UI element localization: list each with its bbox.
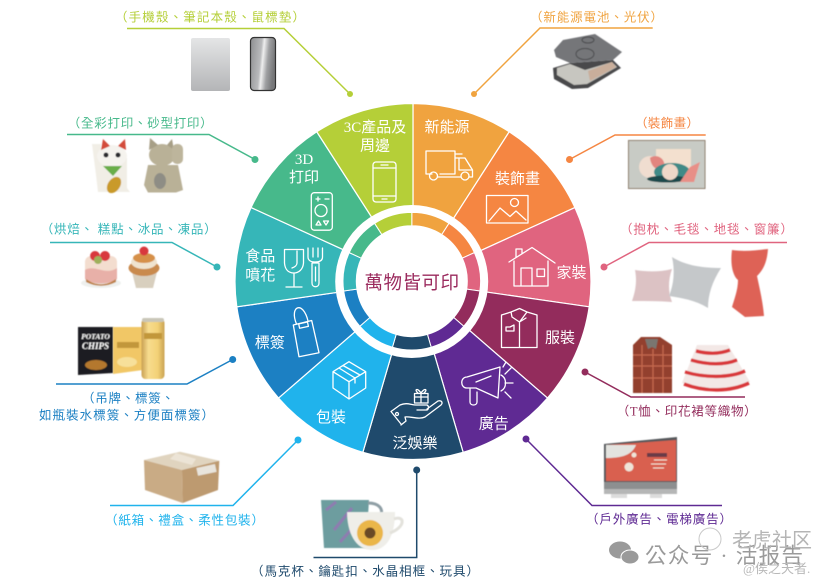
segment: 服裝 <box>458 290 589 402</box>
callout: advertising <box>522 436 732 526</box>
label: 食品噴花: 食品 <box>245 248 275 265</box>
callout: labels: （吊牌、標簽、 <box>82 390 174 406</box>
segment: 家裝 <box>467 208 615 345</box>
label: 3D打印: 3D <box>295 152 313 168</box>
label: 服裝: 服裝 <box>545 330 575 346</box>
icon: gift on hand <box>391 390 442 425</box>
text: 公众号: 公众号 · 活报告 <box>645 544 803 568</box>
icon: glass and fork <box>284 248 322 287</box>
callout: decorative painting <box>566 116 706 188</box>
callout: home textile <box>600 222 793 317</box>
segment: 泛娛樂 <box>337 338 463 479</box>
image: lucky cat sand colour <box>144 138 183 192</box>
text: handle: @侯之天者. <box>743 561 810 576</box>
image: black chips bag: POTATO <box>81 332 110 341</box>
image: cupcake <box>128 246 160 288</box>
segment: 3C產品及周邊: 周邊 <box>360 138 390 154</box>
image: pink pillow <box>632 269 672 302</box>
icon: truck <box>426 151 472 180</box>
label: 包裝: 包裝 <box>316 409 346 426</box>
callout: 3C products <box>115 10 353 97</box>
image: yellow chips bag <box>113 327 143 374</box>
image: lucky cat full colour <box>92 139 130 196</box>
callout: 3C products: （手機殼、筆記本殼、鼠標墊） <box>115 10 305 24</box>
label: 3C產品及周邊: 3C產品及 <box>344 119 406 136</box>
callout: new energy: （新能源電池、光伏） <box>530 10 663 24</box>
image: plaid shirt <box>633 337 672 393</box>
icon: picture <box>486 196 528 223</box>
image: billboard <box>604 437 677 498</box>
icon: box <box>333 362 366 399</box>
segment: 3D打印 <box>251 120 399 257</box>
image: strawberry cake <box>81 251 121 288</box>
icon: smartphone <box>373 162 396 202</box>
callout: food <box>41 222 221 288</box>
title: 萬物皆可印: 萬物皆可印 <box>364 273 460 294</box>
image: sunflower cup <box>347 512 402 550</box>
callout: food: （烘焙、 糕點、冰品、凍品） <box>41 222 217 236</box>
image: phone case <box>250 38 276 90</box>
inner coloured ring <box>335 203 490 358</box>
icon: bag tag <box>293 308 319 357</box>
image: black chips bag <box>78 327 113 375</box>
segment: 新能源 <box>413 104 509 223</box>
segment: 食品噴花: 噴花 <box>245 267 275 284</box>
text: 老虎社区: 老虎社区 <box>732 529 812 552</box>
label: 標簽: 標簽 <box>255 334 285 352</box>
icon: house <box>509 248 555 286</box>
label: 新能源: 新能源 <box>424 119 470 136</box>
callout: 3D printing: （全彩打印、砂型打印） <box>68 116 213 130</box>
image: striped skirt <box>682 345 750 390</box>
image: abstract painting <box>628 140 705 188</box>
callout: pan-entertainment: （馬克杯、鑰匙扣、水晶相框、玩具） <box>251 564 479 578</box>
callout: labels <box>39 318 236 422</box>
segment: 裝飾畫 <box>445 132 590 284</box>
white hub <box>335 205 488 358</box>
callout: advertising: （戶外廣告、電梯廣告） <box>586 512 732 526</box>
image: red scarf <box>731 249 768 317</box>
callout: packaging <box>105 436 302 528</box>
callout: labels: 如瓶裝水標簽、方便面標簽） <box>39 408 214 422</box>
icon: shirt <box>502 308 537 348</box>
icon: remote <box>311 193 332 230</box>
callout: pan-entertainment <box>251 466 479 578</box>
segment: 食品噴花 <box>223 195 355 307</box>
label: 廣告: 廣告 <box>479 414 509 432</box>
label: 裝飾畫: 裝飾畫 <box>495 170 540 188</box>
icon: swirl logo <box>699 528 721 550</box>
segment: 包裝 <box>271 311 396 452</box>
segment: 3C產品及周邊 <box>317 80 462 232</box>
callout: home textile: （抱枕、毛毯、地毯、窗簾） <box>620 222 793 236</box>
callout: clothing <box>582 337 757 418</box>
segment: 廣告 <box>394 320 548 471</box>
callout: 3D printing <box>67 116 258 196</box>
label: 泛娛樂: 泛娛樂 <box>392 435 438 452</box>
image: grey pillow <box>669 257 721 308</box>
image: battery pack <box>553 34 622 89</box>
image: chips can <box>142 318 164 379</box>
image: tablet case <box>191 38 230 91</box>
image: cardboard box <box>144 452 219 503</box>
callout: clothing: （T恤、印花裙等織物） <box>617 404 757 418</box>
callout: packaging: （紙箱、禮盒、柔性包裝） <box>105 512 264 528</box>
label: 家裝: 家裝 <box>556 264 587 282</box>
image: black chips bag: CHIPS <box>82 341 109 351</box>
wheel: application segments <box>215 80 615 479</box>
callout: decorative painting: （裝飾畫） <box>635 116 699 130</box>
segment: 3D打印: 打印 <box>289 169 319 186</box>
watermark: WeChat official account <box>609 528 812 576</box>
icon: megaphone <box>462 362 513 405</box>
callout: new energy <box>471 10 663 97</box>
icon: WeChat bubbles <box>609 542 639 564</box>
image: patterned mug <box>321 500 382 548</box>
segment: 標籤 <box>215 247 368 398</box>
